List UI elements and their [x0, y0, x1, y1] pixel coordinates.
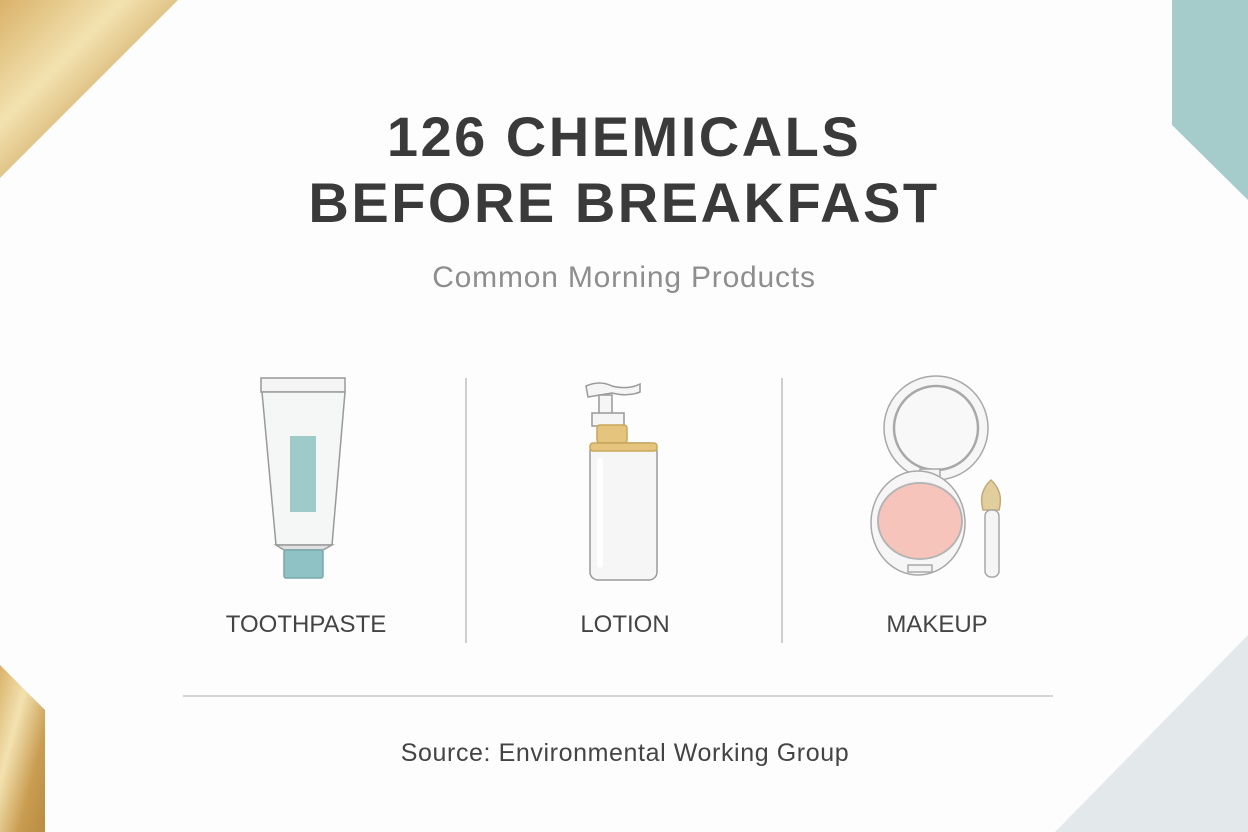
- title: 126 CHEMICALS: [387, 105, 861, 168]
- icon: toothpaste: [261, 378, 345, 578]
- label: toothpaste: TOOTHPASTE: [226, 611, 386, 638]
- subtitle: Common Morning Products: [432, 261, 816, 294]
- title: [308, 105, 940, 234]
- icon: makeup: [871, 376, 1000, 577]
- divider: [781, 378, 783, 643]
- label: makeup: MAKEUP: [886, 611, 988, 638]
- horizontal rule: [183, 695, 1053, 697]
- title: BEFORE BREAKFAST: [308, 171, 940, 234]
- label: lotion: LOTION: [580, 611, 670, 638]
- source: Source: Environmental Working Group: [401, 739, 849, 767]
- divider: [465, 378, 467, 643]
- icon: lotion: [586, 383, 657, 580]
